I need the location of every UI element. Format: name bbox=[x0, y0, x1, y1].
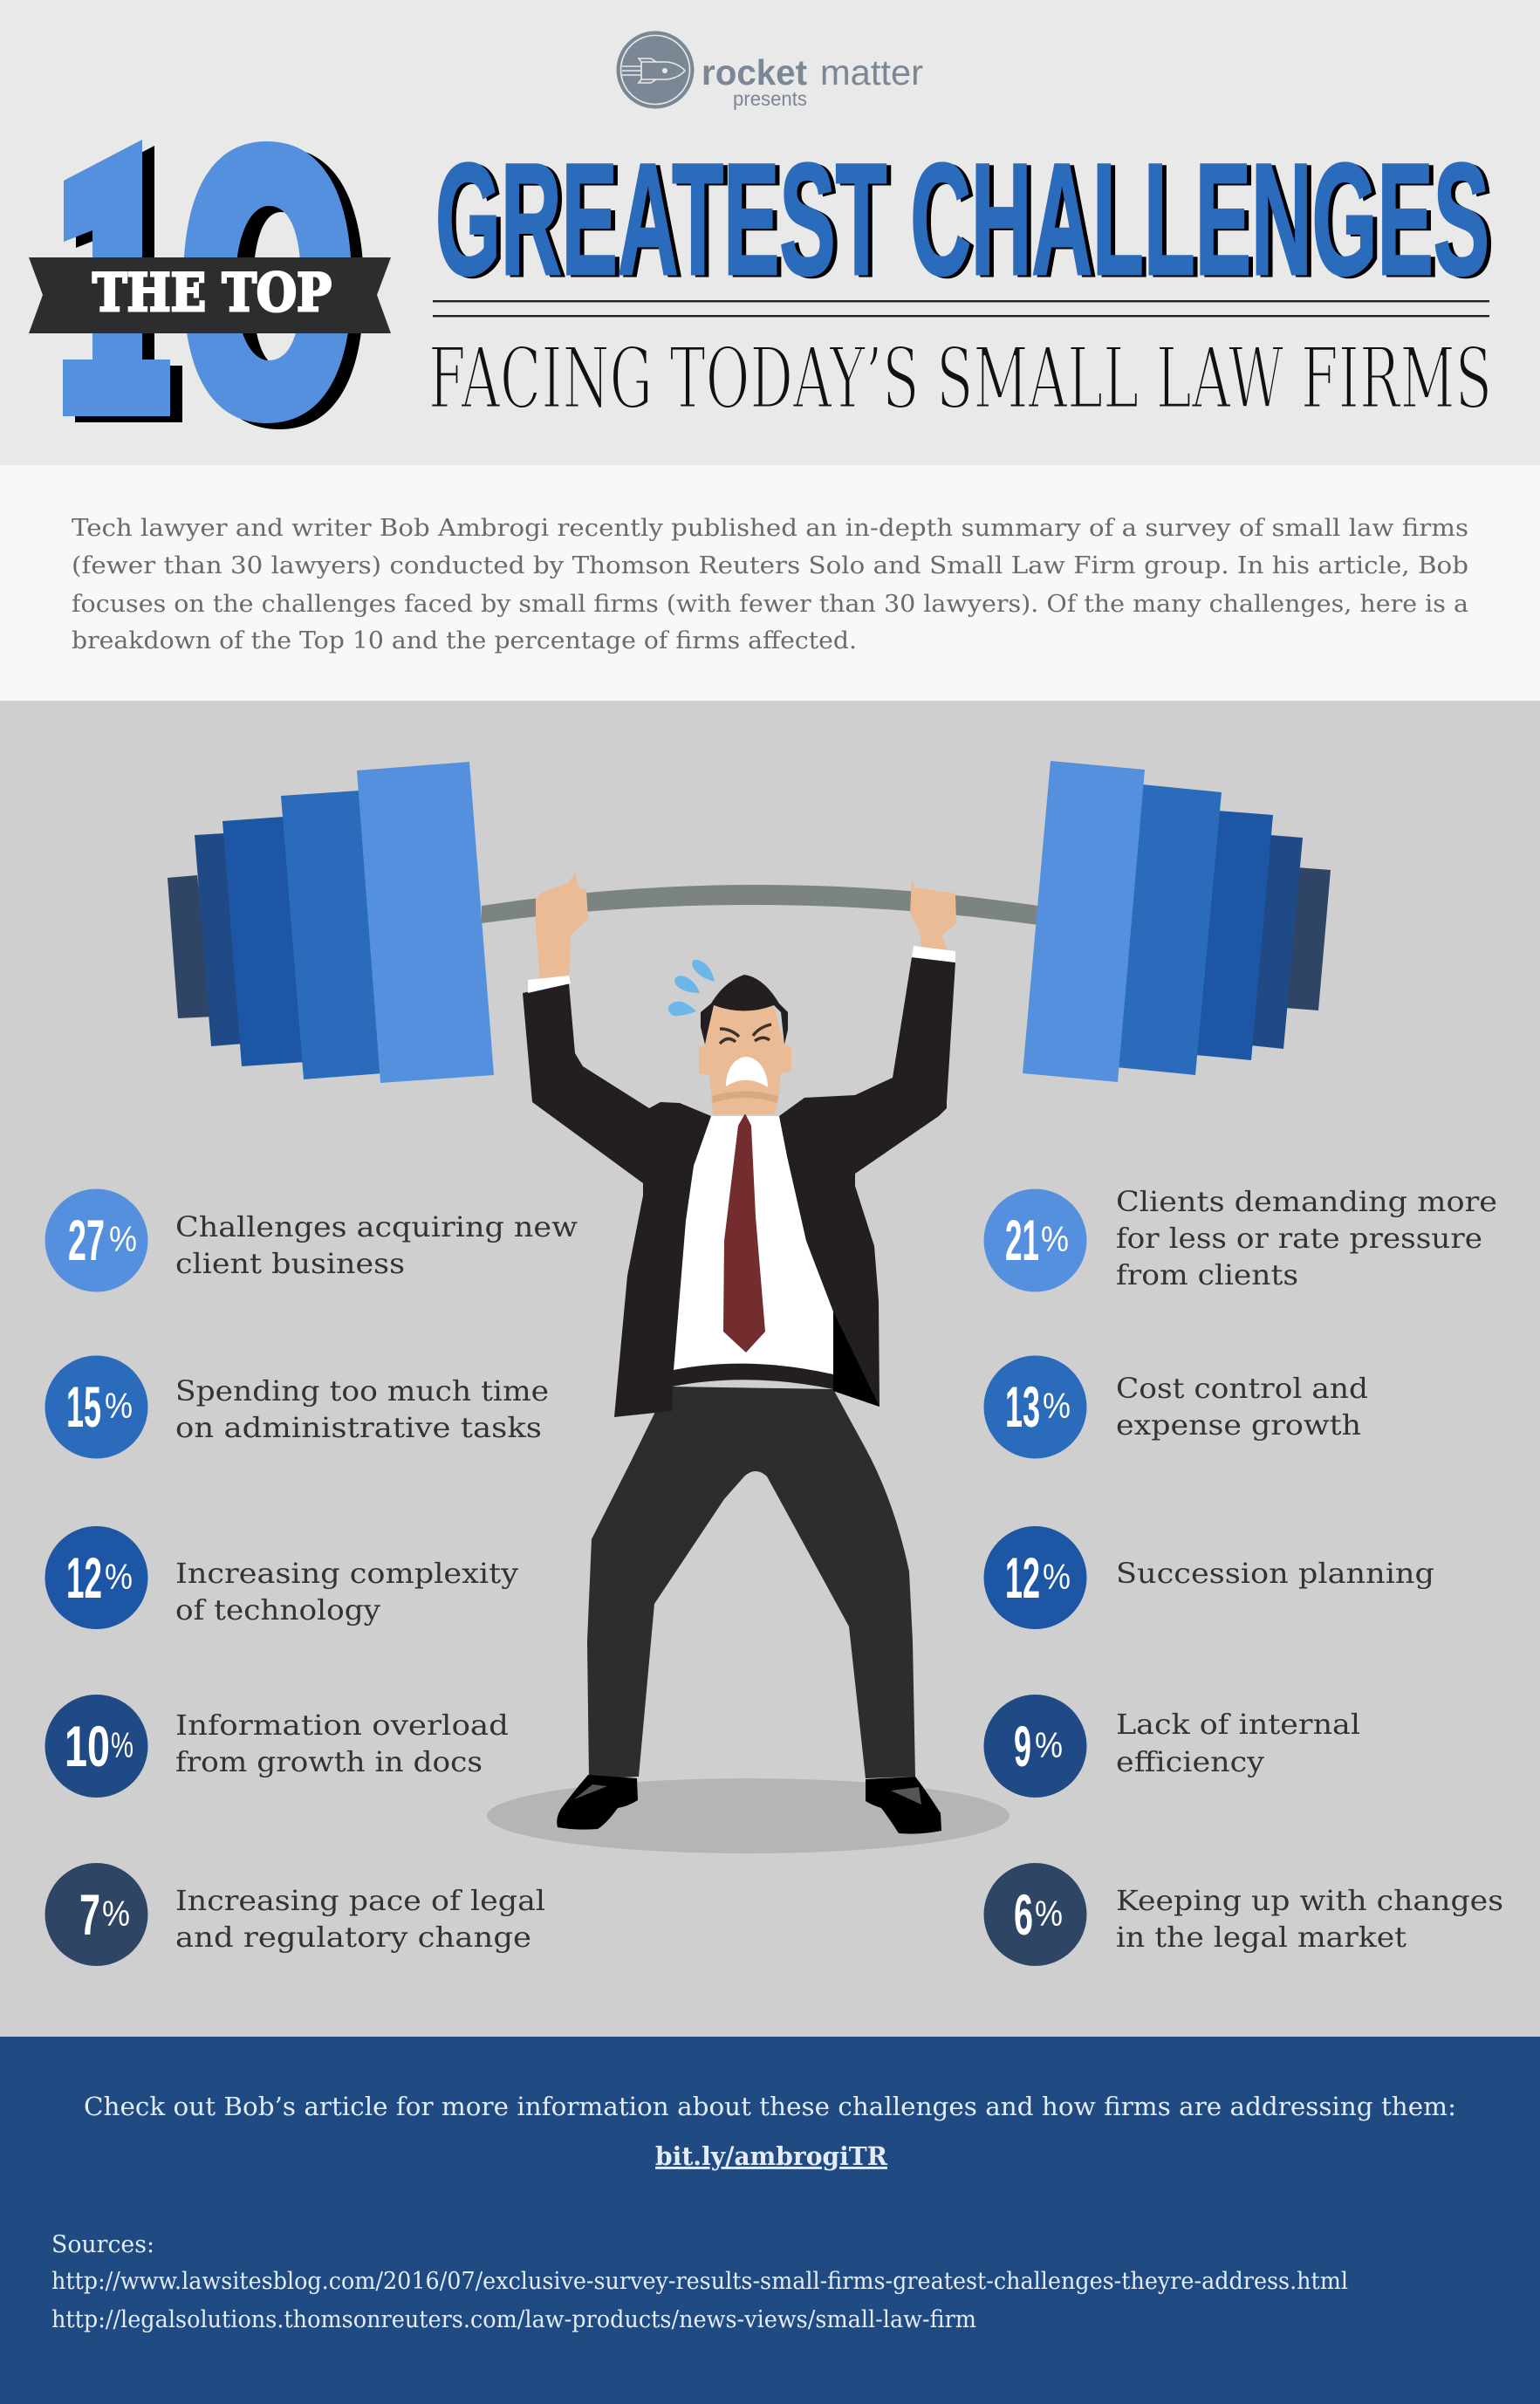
stat: 21%: % bbox=[1041, 1219, 1069, 1259]
necktie bbox=[723, 1113, 765, 1353]
call to action: Check out Bob’s article for more information about these challenges and how firms are addressing them: bbox=[84, 2092, 1456, 2121]
stat: 7%: 7 bbox=[79, 1882, 100, 1947]
stat: 12% right: % bbox=[1043, 1557, 1071, 1597]
right shoe bbox=[866, 1777, 941, 1834]
stat: 21%: 21 bbox=[1005, 1208, 1039, 1272]
belt bbox=[672, 1364, 833, 1389]
stat: 27%: % bbox=[109, 1219, 137, 1259]
stat: 9% bbox=[984, 1695, 1360, 1798]
trousers bbox=[587, 1387, 915, 1779]
shirt bbox=[674, 1116, 833, 1374]
stat: 21%: for less or rate pressure bbox=[1116, 1222, 1482, 1255]
stat: 13% bbox=[984, 1356, 1368, 1459]
stat: 10% bbox=[45, 1695, 509, 1798]
stat: 12% left: 12 bbox=[66, 1545, 102, 1610]
stat: 9%: 9 bbox=[1014, 1714, 1031, 1778]
stat: 9%: Lack of internal bbox=[1116, 1708, 1360, 1741]
left shoe bbox=[557, 1775, 638, 1830]
stat: 15%: Spending too much time bbox=[175, 1374, 549, 1407]
right plates bbox=[1023, 761, 1331, 1082]
illustration: businessman lifting barbell bbox=[168, 761, 1331, 1853]
stat: 15%: on administrative tasks bbox=[175, 1411, 542, 1444]
stat: 21%: from clients bbox=[1116, 1258, 1298, 1291]
sources: http://www.lawsitesblog.com/2016/07/exclusive-survey-results-small-firms-greatest-challenges-theyre-address.html bbox=[51, 2268, 1348, 2295]
stat: 12% left: of technology bbox=[175, 1593, 380, 1627]
stat: 7%: % bbox=[102, 1894, 130, 1934]
floor shadow bbox=[487, 1778, 1010, 1853]
logo wordmark: rocket bbox=[702, 52, 807, 92]
icon: sweat drops bbox=[668, 960, 715, 1016]
left arm hand bbox=[536, 872, 588, 981]
numeral 0 bbox=[183, 141, 352, 423]
stat: 6% bbox=[984, 1863, 1503, 1966]
head bbox=[699, 975, 791, 1114]
panel: footer bbox=[0, 2037, 1540, 2404]
stat: 27%: 27 bbox=[68, 1208, 105, 1272]
barbell bar bbox=[482, 885, 1038, 925]
stat: 13%: 13 bbox=[1005, 1374, 1040, 1439]
numeral 1 bbox=[63, 140, 170, 416]
stat: 10%: % bbox=[111, 1725, 133, 1765]
left plates bbox=[168, 762, 494, 1083]
panel: header bbox=[0, 0, 1540, 465]
panel: intro text: Tech lawyer and writer Bob Ambrogi recently published an in-depth summary of a survey of small law firms bbox=[72, 514, 1468, 542]
stat: 9%: efficiency bbox=[1116, 1745, 1264, 1778]
stat: 27%: client business bbox=[175, 1247, 405, 1280]
numeral 1 shadow bbox=[75, 146, 182, 422]
logo: rocket matter presents: matter bbox=[820, 52, 923, 92]
panel: intro text: (fewer than 30 lawyers) conducted by Thomson Reuters Solo and Small Law Firm group. In his article, Bob bbox=[72, 551, 1468, 579]
stat: 7%: and regulatory change bbox=[175, 1921, 531, 1954]
stat: 13%: expense growth bbox=[1116, 1408, 1361, 1442]
right arm hand bbox=[910, 876, 956, 953]
stat: 12% left: % bbox=[105, 1557, 133, 1597]
stat: 15%: % bbox=[105, 1386, 133, 1426]
stat: 9%: % bbox=[1035, 1725, 1063, 1765]
stat: 13%: Cost control and bbox=[1116, 1372, 1368, 1405]
sources bbox=[51, 2231, 1348, 2333]
stat: 13%: % bbox=[1043, 1386, 1071, 1426]
article link: bit.ly/ambrogiTR bbox=[655, 2141, 888, 2171]
stat: 10%: Information overload bbox=[175, 1709, 509, 1742]
stat: 10%: from growth in docs bbox=[175, 1745, 483, 1778]
stat: 10%: 10 bbox=[65, 1714, 110, 1778]
sources: Sources: bbox=[51, 2231, 154, 2258]
panel: intro text: breakdown of the Top 10 and the percentage of firms affected. bbox=[72, 627, 857, 654]
jacket bbox=[523, 957, 955, 1417]
stat: 12% left bbox=[45, 1526, 518, 1629]
stat: 6%: Keeping up with changes bbox=[1116, 1884, 1503, 1917]
shirt cuffs bbox=[528, 946, 955, 993]
stat: 27% bbox=[45, 1188, 578, 1291]
stat: 21%: Clients demanding more bbox=[1116, 1185, 1497, 1218]
stat: 12% left: Increasing complexity bbox=[175, 1557, 518, 1590]
presents label: presents bbox=[733, 87, 807, 110]
stat: 7% bbox=[45, 1863, 545, 1966]
ribbon label: THE TOP bbox=[92, 263, 332, 324]
logo: rocket matter presents bbox=[616, 31, 923, 110]
stat: 6%: % bbox=[1035, 1894, 1063, 1934]
stat: 12% right: Succession planning bbox=[1116, 1557, 1434, 1590]
stat: 15% bbox=[45, 1356, 549, 1459]
stat: 6%: in the legal market bbox=[1116, 1921, 1407, 1954]
big number 10 with ribbon bbox=[29, 140, 391, 429]
icon: rocket badge bbox=[616, 31, 695, 108]
numeral 0 shadow bbox=[195, 147, 364, 429]
stat: 12% right bbox=[984, 1526, 1434, 1629]
stat: 21% bbox=[984, 1185, 1497, 1291]
sources: http://legalsolutions.thomsonreuters.com/law-products/news-views/small-law-firm bbox=[51, 2306, 976, 2333]
stat: 12% right: 12 bbox=[1005, 1545, 1040, 1610]
stat: 7%: Increasing pace of legal bbox=[175, 1884, 545, 1917]
ribbon bbox=[29, 257, 391, 333]
stat: 15%: 15 bbox=[66, 1374, 101, 1439]
panel: intro text: focuses on the challenges faced by small firms (with fewer than 30 lawyers). Of the many challenges, here is a bbox=[72, 590, 1468, 618]
panel: main challenges bbox=[0, 701, 1540, 2037]
stat: 27%: Challenges acquiring new bbox=[175, 1210, 578, 1243]
stat: 6%: 6 bbox=[1014, 1882, 1033, 1947]
panel: intro text bbox=[0, 465, 1540, 701]
